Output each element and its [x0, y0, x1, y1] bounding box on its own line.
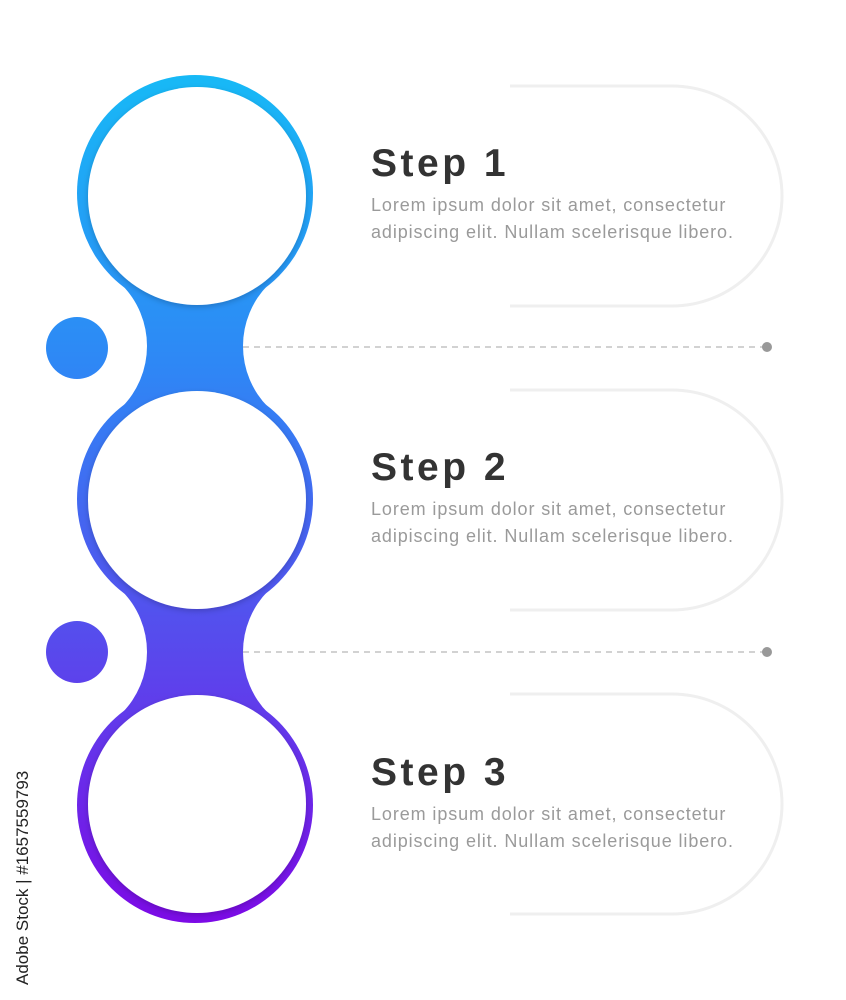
step 2 text: Step 2	[371, 446, 509, 489]
dashed connectors	[243, 347, 765, 652]
inner circles	[88, 87, 306, 913]
step 1 text: Step 1	[371, 142, 509, 185]
watermark id: Adobe Stock | #1657559793	[13, 771, 32, 985]
step 1 text: adipiscing elit. Nullam scelerisque libero.	[371, 222, 734, 242]
step 3 text	[371, 751, 734, 851]
step 3 text: Lorem ipsum dolor sit amet, consectetur	[371, 804, 726, 824]
step 2 text: adipiscing elit. Nullam scelerisque libero.	[371, 526, 734, 546]
step 3 text: Step 3	[371, 751, 509, 794]
step 1 text: Lorem ipsum dolor sit amet, consectetur	[371, 195, 726, 215]
step 2 text	[371, 446, 734, 546]
step 1 text	[371, 142, 734, 242]
chain shape	[46, 75, 313, 923]
step 3 text: adipiscing elit. Nullam scelerisque libero.	[371, 831, 734, 851]
pills	[510, 86, 782, 914]
step 2 text: Lorem ipsum dolor sit amet, consectetur	[371, 499, 726, 519]
